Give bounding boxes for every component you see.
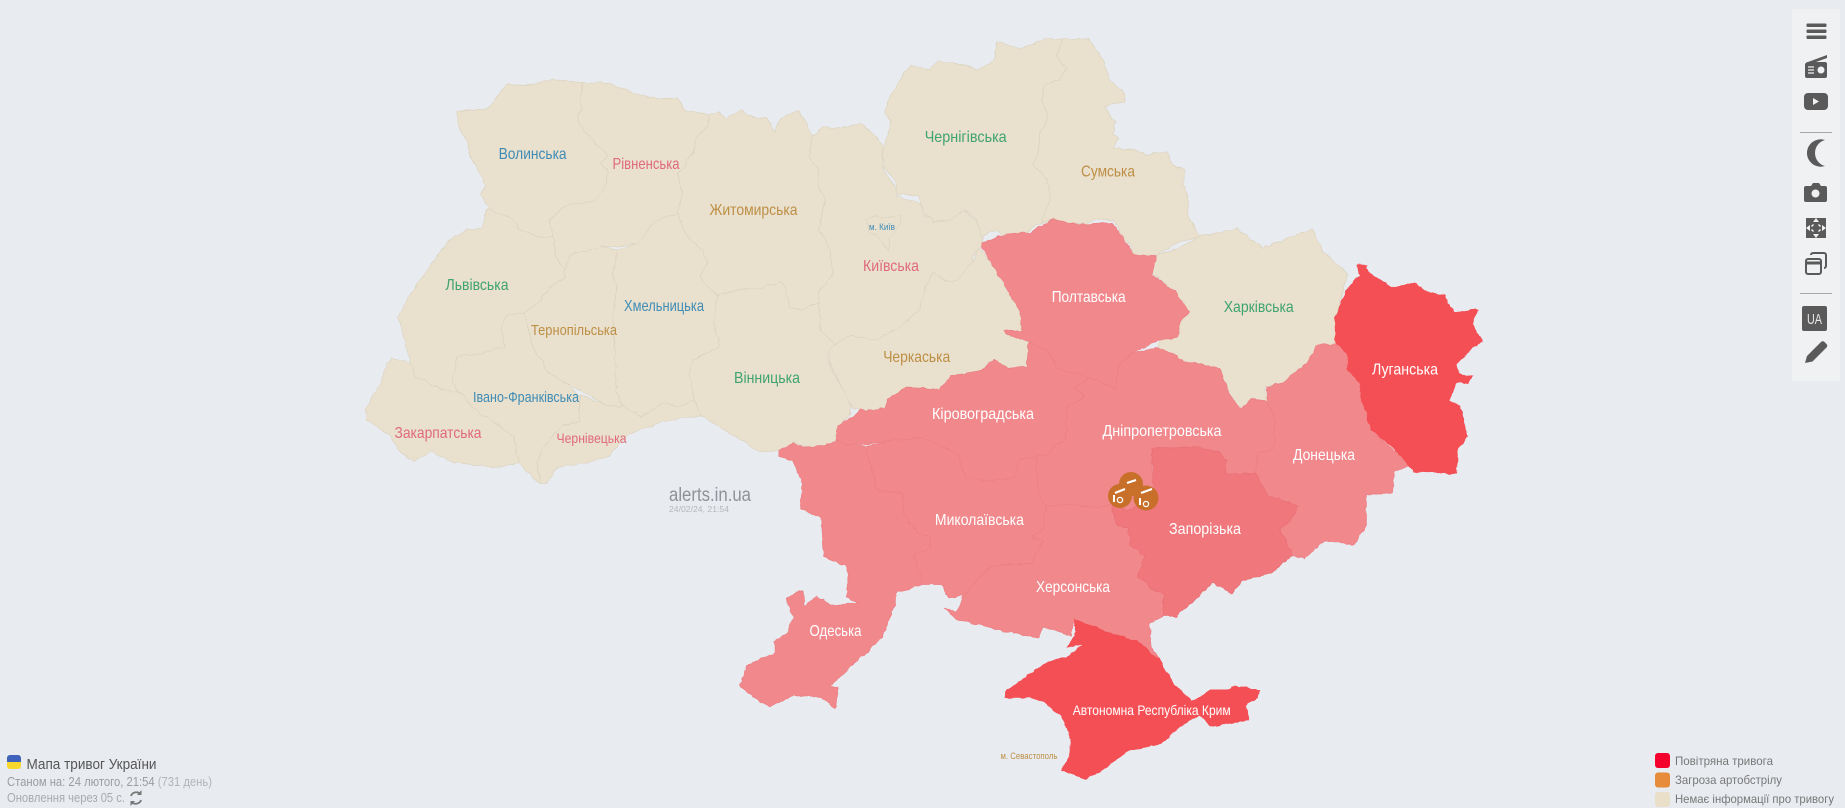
- label: Donetsk: Донецька: [1293, 447, 1355, 464]
- legend item: artillery threat: Загроза артобстрілу: [1675, 773, 1782, 787]
- region: Volyn: [457, 79, 608, 237]
- region: Ivano-Frankivsk: [453, 313, 580, 483]
- label: Sumy: Сумська: [1081, 164, 1135, 180]
- label: Zaporizhzhia: Запорізька: [1169, 521, 1241, 538]
- label: Luhansk: Луганська: [1372, 362, 1438, 378]
- icon: fullscreen: [1806, 218, 1826, 238]
- divider: [1800, 132, 1832, 133]
- label: Vinnytsia: Вінницька: [734, 370, 800, 387]
- label: Kherson: Херсонська: [1036, 579, 1110, 596]
- region: Mykolaiv: [866, 437, 1046, 598]
- icon: moon: [1807, 139, 1825, 167]
- label: Ivano-Frankivsk: Івано-Франківська: [473, 390, 580, 406]
- label: Rivne: Рівненська: [612, 156, 680, 173]
- region: Kirovohrad: [836, 342, 1090, 481]
- region: Rivne: [549, 83, 709, 270]
- label: Volyn: Волинська: [499, 146, 567, 163]
- label: Sevastopol: м. Севастополь: [1000, 751, 1058, 761]
- label: Kirovohrad: Кіровоградська: [932, 406, 1034, 423]
- region: Cherkasy: [828, 248, 1029, 410]
- region: Chernivtsi: [537, 395, 701, 483]
- region: Kherson: [944, 504, 1164, 659]
- region: Odesa: [739, 441, 930, 709]
- region: Zhytomyr: [678, 110, 833, 309]
- northern oblasts: [883, 38, 1200, 258]
- label: Zakarpattia: Закарпатська: [394, 425, 482, 442]
- region: Khmelnytskyi: [613, 213, 720, 417]
- label: Zhytomyr: Житомирська: [710, 202, 798, 219]
- icon: artillery threat markers: [1108, 472, 1158, 510]
- label: Ternopil: Тернопільська: [531, 322, 618, 339]
- label: Lviv: Львівська: [446, 277, 509, 294]
- panel: map title and status: [7, 755, 212, 806]
- panel: toolbar: [1792, 9, 1840, 381]
- watermark: alerts.in.ua: alerts.in.ua: [669, 485, 751, 506]
- icon: radio: [1805, 55, 1827, 78]
- label: Poltava: Полтавська: [1052, 289, 1126, 306]
- label: Cherkasy: Черкаська: [883, 349, 950, 366]
- region: Poltava: [980, 219, 1189, 389]
- legend item: air alert: Повітряна тривога: [1675, 754, 1773, 768]
- oblast labels: [394, 129, 1438, 761]
- update line: Оновлення через 05 с.: [7, 791, 125, 805]
- label: Chernivtsi: Чернівецька: [556, 430, 627, 446]
- divider: [1800, 293, 1832, 294]
- legend: [1655, 753, 1834, 807]
- icon: windows: [1806, 253, 1826, 274]
- label: Mykolaiv: Миколаївська: [935, 512, 1024, 529]
- region: Ternopil: [524, 247, 623, 407]
- region: Luhansk: [1335, 265, 1482, 474]
- region: Kyiv city: [867, 215, 901, 250]
- region: Lviv: [398, 210, 566, 392]
- button: UA language: [1802, 306, 1827, 331]
- label: Dnipropetrovsk: Дніпропетровська: [1102, 423, 1222, 440]
- legend item: no information: Немає інформації про тривогу: [1675, 792, 1834, 806]
- status line: Станом на: 24 лютого, 21:54 (731 день): [7, 775, 212, 789]
- region: Crimea: [1005, 619, 1260, 780]
- icon: refresh: [130, 790, 142, 806]
- label: Crimea: Автономна Республіка Крим: [1073, 702, 1231, 718]
- icon: menu: [1806, 24, 1826, 39]
- region: Zakarpattia: [366, 358, 519, 467]
- region: Sumy: [1033, 38, 1200, 258]
- western oblasts: [366, 79, 983, 483]
- label: Chernihiv: Чернігівська: [925, 129, 1007, 146]
- region: Kharkiv: [1152, 229, 1348, 409]
- label: Kyiv city: м. Київ: [869, 222, 895, 232]
- icon: pencil: [1805, 341, 1827, 363]
- icon: camera: [1804, 183, 1827, 202]
- watermark date: 24/02/24, 21:54: [669, 505, 730, 514]
- label: Kyiv oblast: Київська: [863, 258, 919, 275]
- region: Zaporizhzhia: [1112, 447, 1298, 617]
- label: Kharkiv: Харківська: [1224, 299, 1294, 316]
- region: Vinnytsia: [688, 282, 850, 452]
- icon: video: [1804, 93, 1828, 110]
- region: Kyiv oblast: [808, 123, 983, 347]
- map: Ukraine oblasts: [366, 38, 1482, 780]
- central and eastern beige oblasts: [828, 229, 1348, 410]
- heading: Мапа тривог України: [26, 756, 156, 773]
- region: Dnipropetrovsk: [1036, 347, 1274, 510]
- region: Donetsk: [1256, 343, 1411, 558]
- label: Khmelnytskyi: Хмельницька: [624, 298, 704, 315]
- label: Odesa: Одеська: [810, 623, 862, 640]
- button: UA language: UA: [1807, 311, 1822, 328]
- southern alert oblasts: [739, 219, 1482, 780]
- region: Chernihiv: [883, 38, 1067, 237]
- icon: Ukrainian flag: [7, 755, 21, 769]
